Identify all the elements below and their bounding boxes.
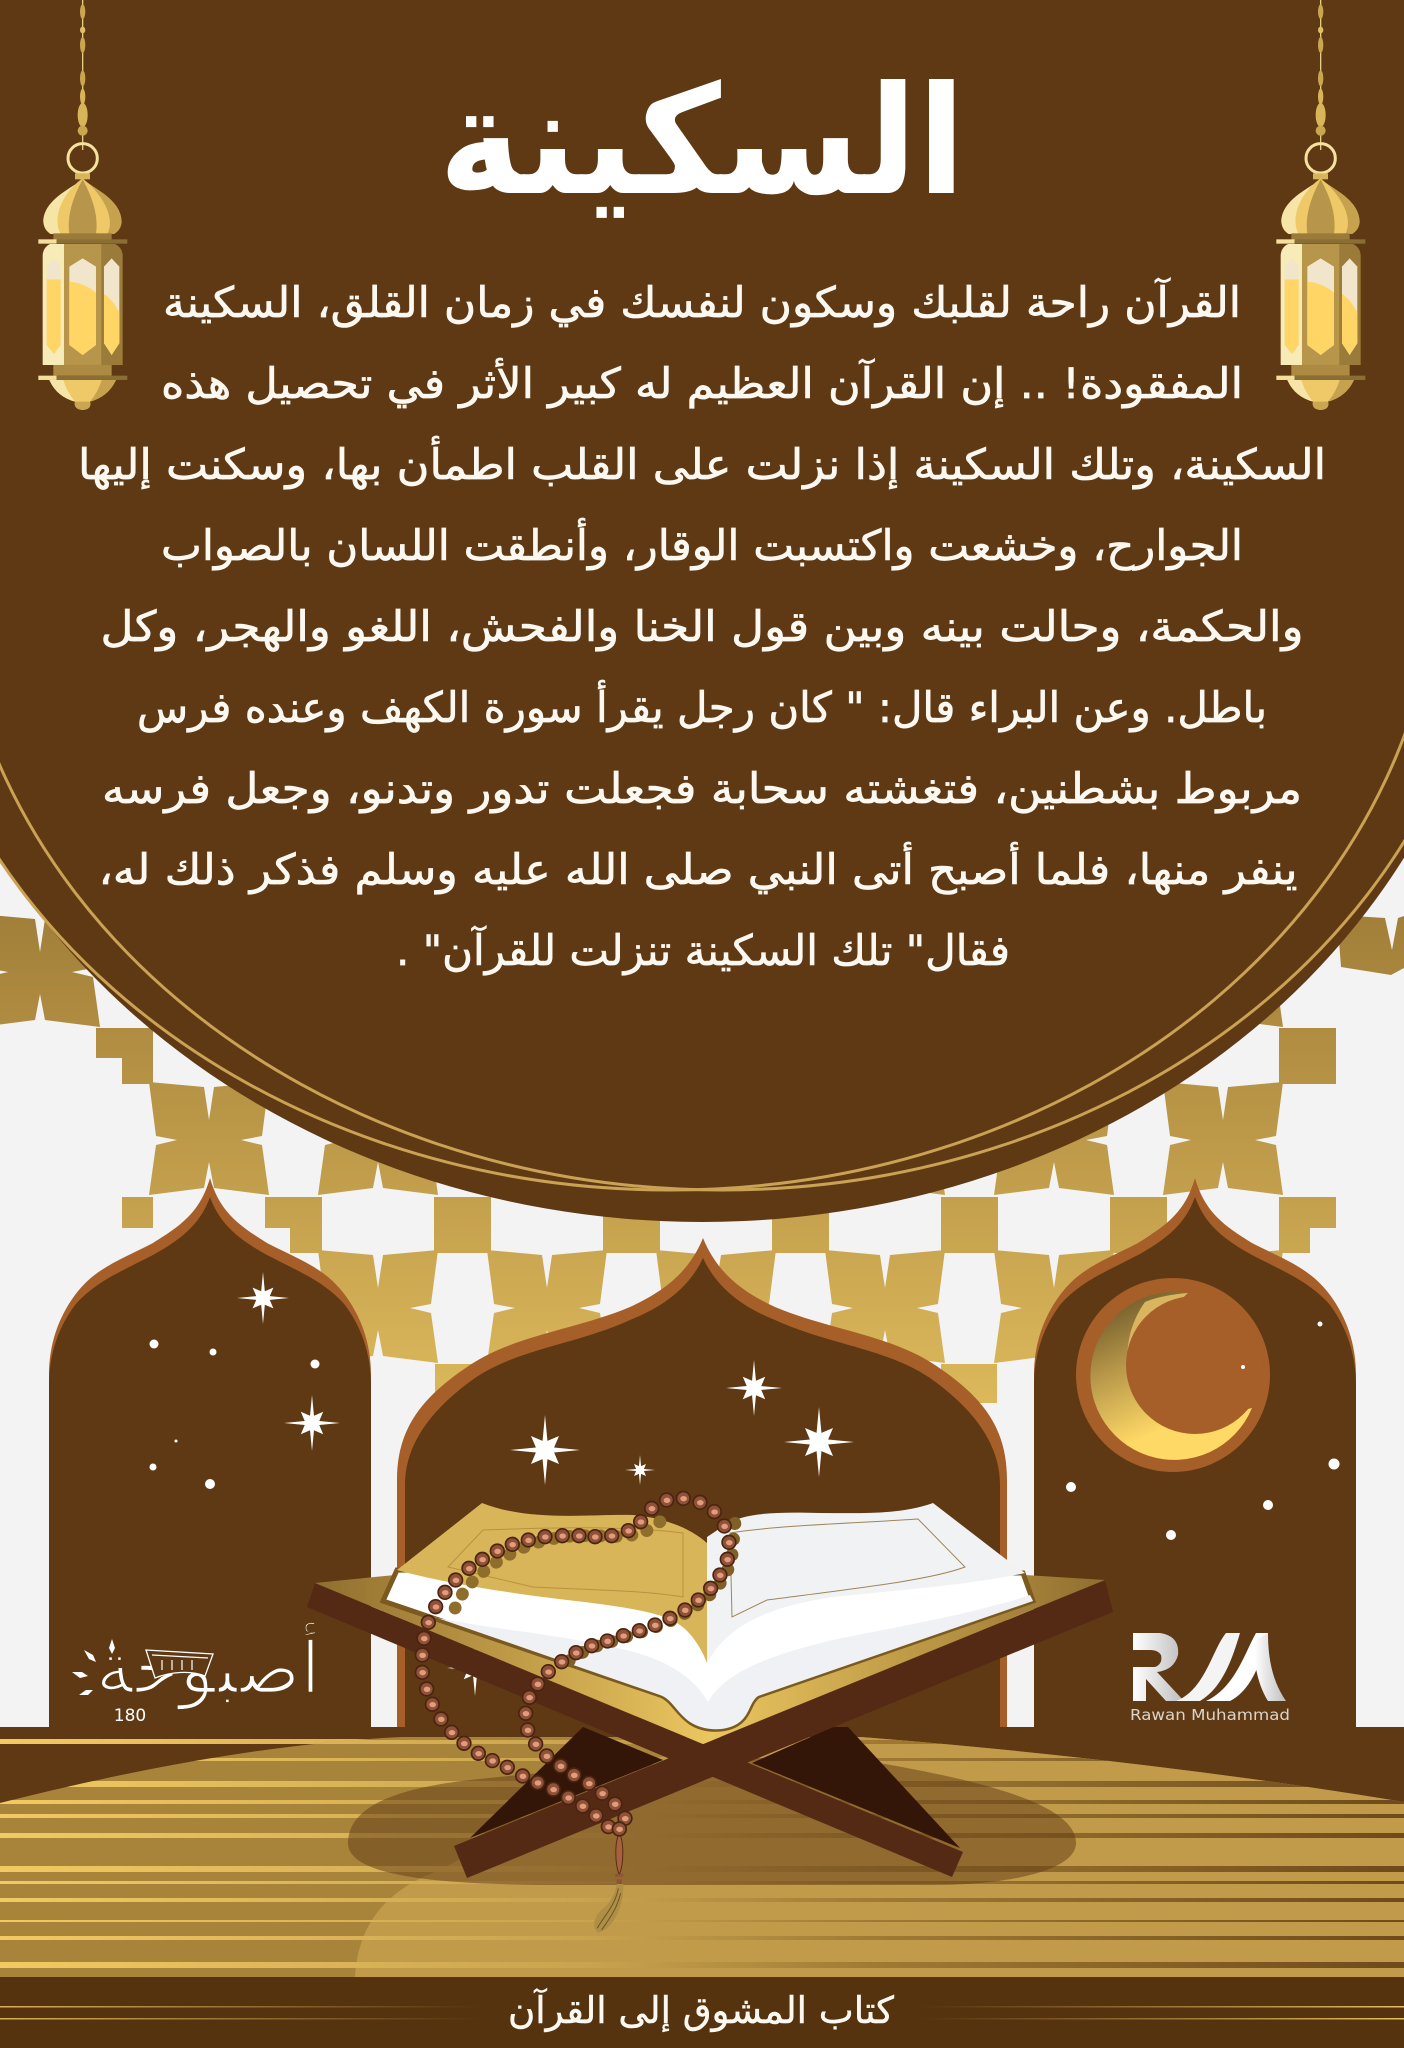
body text block: الجوارح، وخشعت واكتسبت الوقار، وأنطقت اللسان بالصواب bbox=[161, 518, 1243, 570]
RM logo caption: Rawan Muhammad bbox=[1130, 1706, 1290, 1724]
body text block: القرآن راحة لقلبك وسكون لنفسك في زمان القلق، السكينة bbox=[163, 277, 1241, 328]
body text block: المفقودة! .. إن القرآن العظيم له كبير الأثر في تحصيل هذه bbox=[161, 357, 1243, 409]
RM logo bbox=[1130, 1633, 1290, 1724]
lantern: right bbox=[1276, 0, 1365, 410]
body text block: فقال" تلك السكينة تنزلت للقرآن" . bbox=[396, 925, 1010, 975]
dome: right with stars bbox=[1034, 1178, 1356, 1727]
geometric gold lattice pattern bbox=[0, 900, 1404, 1430]
crescent moon bbox=[1076, 1278, 1270, 1472]
body text block: مربوط بشطنين، فتغشته سحابة فجعلت تدور وتدنو، وجعل فرسه bbox=[102, 764, 1302, 813]
footer source text: كتاب المشوق إلى القرآن bbox=[508, 1988, 894, 2032]
signature logo: أصبوحة bbox=[96, 1621, 320, 1711]
body text block: ينفر منها، فلما أصبح أتى النبي صلى الله عليه وسلم فذكر ذلك له، bbox=[98, 842, 1298, 895]
floor shadow of stand bbox=[348, 1755, 1076, 1885]
lantern: left bbox=[38, 0, 127, 410]
prayer beads bbox=[415, 1491, 737, 1933]
body text block bbox=[78, 277, 1326, 975]
body text block: باطل. وعن البراء قال: " كان رجل يقرأ سورة الكهف وعنده فرس bbox=[137, 680, 1267, 733]
open Quran bbox=[315, 1503, 1105, 1744]
wooden book stand bbox=[307, 1580, 1113, 1878]
dome: centre with stars bbox=[397, 1238, 1007, 1727]
body text block: والحكمة، وحالت بينه وبين قول الخنا والفحش، اللغو والهجر، وكل bbox=[100, 602, 1304, 652]
signature logo: 180 bbox=[114, 1706, 146, 1726]
body text block: السكينة، وتلك السكينة إذا نزلت على القلب اطمأن بها، وسكنت إليها bbox=[78, 435, 1326, 490]
wooden floor bbox=[0, 1727, 1404, 1977]
dome: left with stars bbox=[49, 1178, 371, 1727]
title: السكينة bbox=[438, 55, 966, 229]
brown arch panel with gold lines bbox=[0, 0, 1404, 1222]
footer band bbox=[0, 1977, 1404, 2048]
